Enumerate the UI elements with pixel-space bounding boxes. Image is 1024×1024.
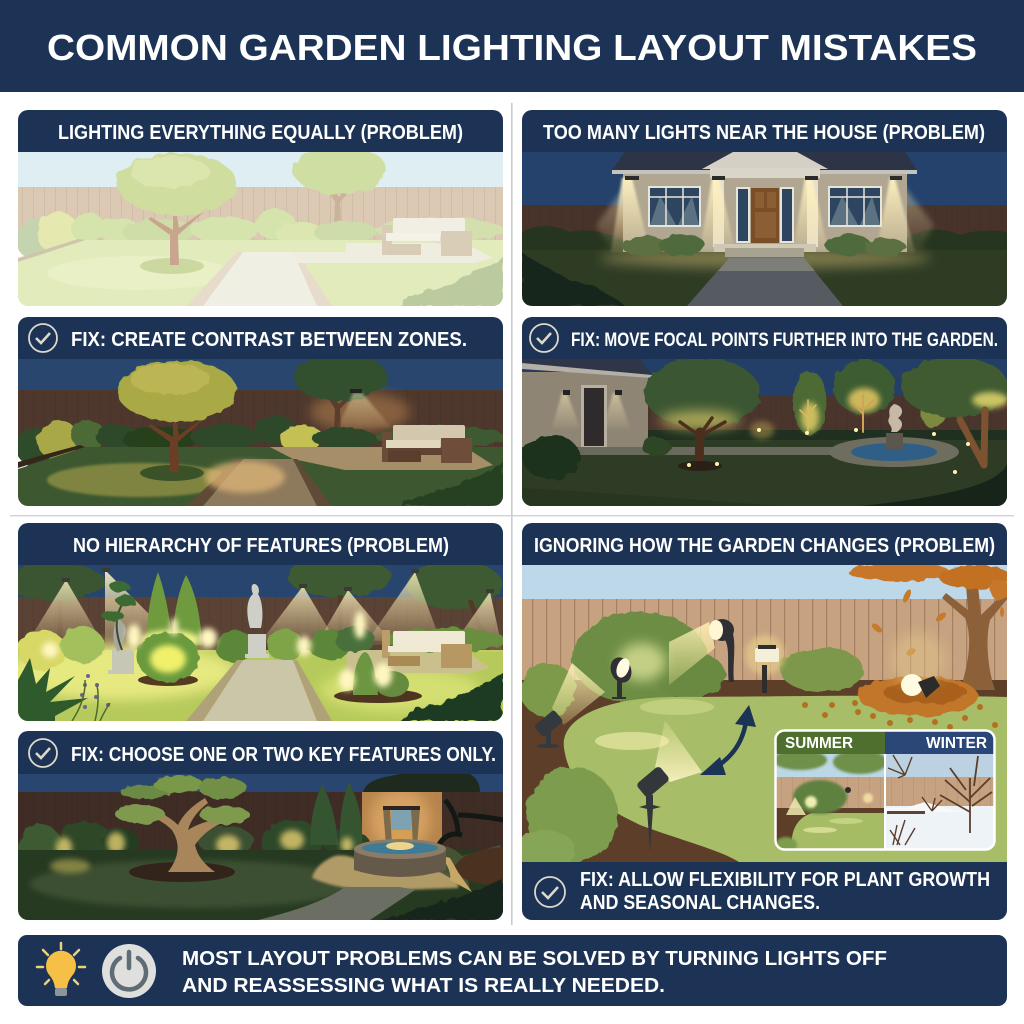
heading bar [522, 523, 1007, 565]
panel: fix, create contrast between zones [16, 317, 504, 506]
heading text: FIX: CREATE CONTRAST BETWEEN ZONES. [71, 329, 467, 351]
icon: check circle [29, 324, 57, 352]
heading bar [522, 317, 1007, 359]
illustration: garden with contrasted lit zones [16, 353, 504, 506]
title: COMMON GARDEN LIGHTING LAYOUT MISTAKES [47, 27, 977, 68]
title banner [0, 0, 1024, 92]
takeaway bar [18, 935, 1007, 1006]
inset label: winter: WINTER [926, 735, 987, 752]
illustration: every feature lit in the garden [5, 557, 505, 721]
illustration: lights spread through garden [522, 357, 1009, 506]
panel: too many lights near the house (problem) [522, 110, 1007, 306]
icon: check circle [535, 877, 565, 907]
heading text: TOO MANY LIGHTS NEAR THE HOUSE (PROBLEM) [543, 122, 985, 144]
panel: ignoring how the garden changes (problem and fix) [515, 523, 1011, 920]
icon: light bulb [37, 943, 85, 996]
heading bar [18, 110, 503, 152]
illustration: bonsai tree and water feature focal points [18, 774, 503, 920]
takeaway text: AND REASSESSING WHAT IS REALLY NEEDED. [182, 974, 665, 997]
icon: power button [102, 944, 156, 998]
heading bar [18, 317, 503, 359]
inset label: summer: SUMMER [785, 735, 853, 752]
heading bar [522, 110, 1007, 152]
panel: fix, move focal points further into the garden [522, 317, 1009, 506]
panel: fix, choose one or two key features only [18, 731, 503, 920]
fix bar [522, 862, 1007, 920]
inset: summer vs winter comparison [773, 730, 995, 853]
panel: lighting everything equally (problem) [16, 110, 504, 306]
heading bar [18, 731, 503, 774]
heading text: FIX: CHOOSE ONE OR TWO KEY FEATURES ONLY. [71, 744, 496, 766]
heading text: LIGHTING EVERYTHING EQUALLY (PROBLEM) [58, 122, 463, 144]
heading bar [18, 523, 503, 565]
heading text: NO HIERARCHY OF FEATURES (PROBLEM) [73, 535, 449, 557]
takeaway text: MOST LAYOUT PROBLEMS CAN BE SOLVED BY TURNING LIGHTS OFF [182, 947, 887, 970]
icon: check circle [29, 739, 57, 767]
illustration: washed-out evenly lit garden [16, 146, 504, 306]
icon: check circle [530, 324, 558, 352]
fix text: AND SEASONAL CHANGES. [580, 892, 820, 914]
illustration: daytime garden with spotlights and seasonal growth [515, 563, 1011, 870]
panel: no hierarchy of features (problem) [5, 523, 505, 721]
illustration: over-lit house at night [522, 152, 1007, 306]
